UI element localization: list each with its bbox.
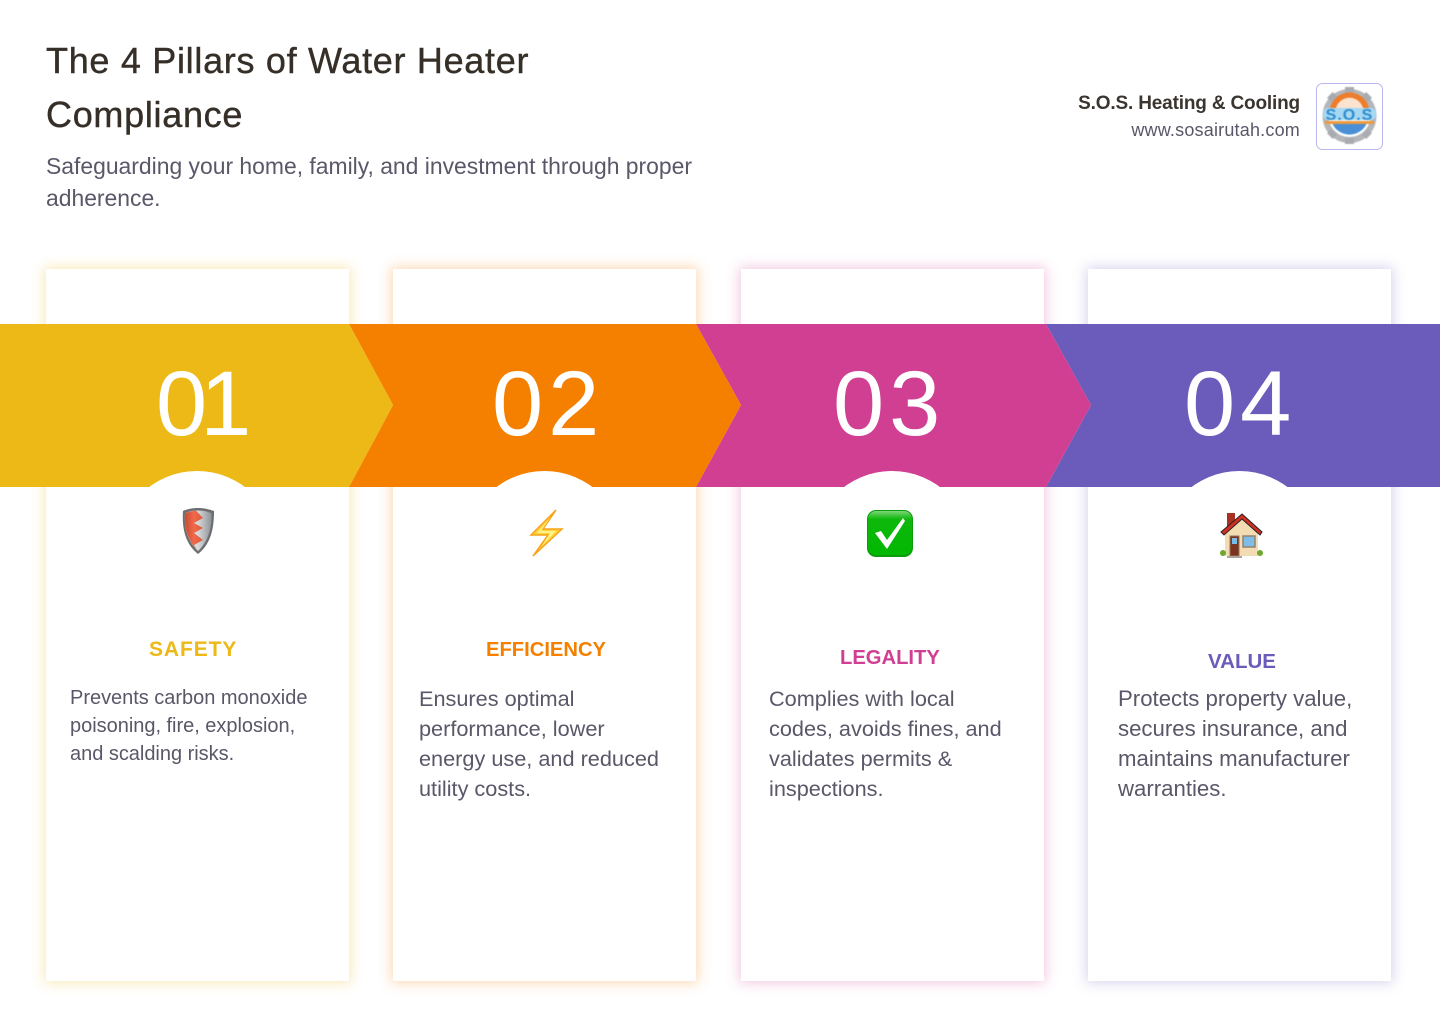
icon: lightning bolt — [529, 510, 564, 556]
panel: legality card — [741, 269, 1044, 981]
text: safety: Prevents carbon monoxide — [70, 687, 307, 709]
number 04: 04 — [1184, 353, 1296, 455]
icon: company logo: S.O.S — [1326, 107, 1373, 124]
heading: legality: LEGALITY — [840, 647, 940, 669]
title: Compliance — [46, 94, 243, 135]
text: efficiency: Ensures optimal — [419, 686, 574, 711]
text: legality — [769, 686, 1002, 801]
title: The 4 Pillars of Water Heater — [46, 40, 529, 81]
icon: house — [1220, 513, 1263, 558]
text: efficiency: energy use, and reduced — [419, 746, 659, 771]
text: value: warranties. — [1118, 776, 1227, 801]
heading: value: VALUE — [1208, 650, 1276, 673]
panel: efficiency card — [393, 269, 696, 981]
text: legality: inspections. — [769, 776, 884, 801]
circle notch 02 — [464, 471, 624, 631]
text: value: maintains manufacturer — [1118, 746, 1350, 771]
icon: company logo — [1316, 83, 1383, 150]
brand name: S.O.S. Heating & Cooling — [1078, 93, 1300, 114]
text: safety: and scalding risks. — [70, 743, 234, 765]
arrow: 01 yellow — [0, 324, 393, 487]
title — [46, 40, 529, 135]
text: value: secures insurance, and — [1118, 716, 1347, 741]
text: efficiency: performance, lower — [419, 716, 605, 741]
circle notch 04 — [1160, 471, 1320, 631]
number 03: 03 — [833, 353, 945, 455]
panel: value card — [1088, 269, 1391, 981]
circle notch 01 — [117, 471, 277, 631]
arrow: 03 pink — [696, 324, 1091, 487]
number 02: 02 — [492, 353, 604, 455]
panel: safety card — [46, 269, 349, 981]
text: legality: validates permits & — [769, 746, 952, 771]
text: efficiency — [419, 686, 659, 801]
subtitle: adherence. — [46, 185, 161, 211]
text: value: Protects property value, — [1118, 686, 1352, 711]
text: efficiency: utility costs. — [419, 776, 531, 801]
subtitle — [46, 153, 692, 211]
brand website: www.sosairutah.com — [1131, 120, 1300, 140]
heading: efficiency: EFFICIENCY — [486, 639, 606, 661]
arrow band — [0, 324, 1440, 487]
header — [46, 40, 1383, 211]
heading: safety: SAFETY — [149, 638, 237, 661]
text: legality: Complies with local — [769, 686, 955, 711]
arrow: 04 purple — [1046, 324, 1440, 487]
circle notch 03 — [812, 471, 972, 631]
icon: shield — [182, 508, 214, 554]
icon: green check — [867, 510, 913, 557]
number 01: 01 — [156, 353, 247, 455]
text: safety — [70, 687, 307, 765]
arrow: 02 orange — [349, 324, 741, 487]
text: value — [1118, 686, 1352, 801]
subtitle: Safeguarding your home, family, and investment through proper — [46, 153, 692, 179]
text: legality: codes, avoids fines, and — [769, 716, 1002, 741]
text: safety: poisoning, fire, explosion, — [70, 715, 295, 737]
